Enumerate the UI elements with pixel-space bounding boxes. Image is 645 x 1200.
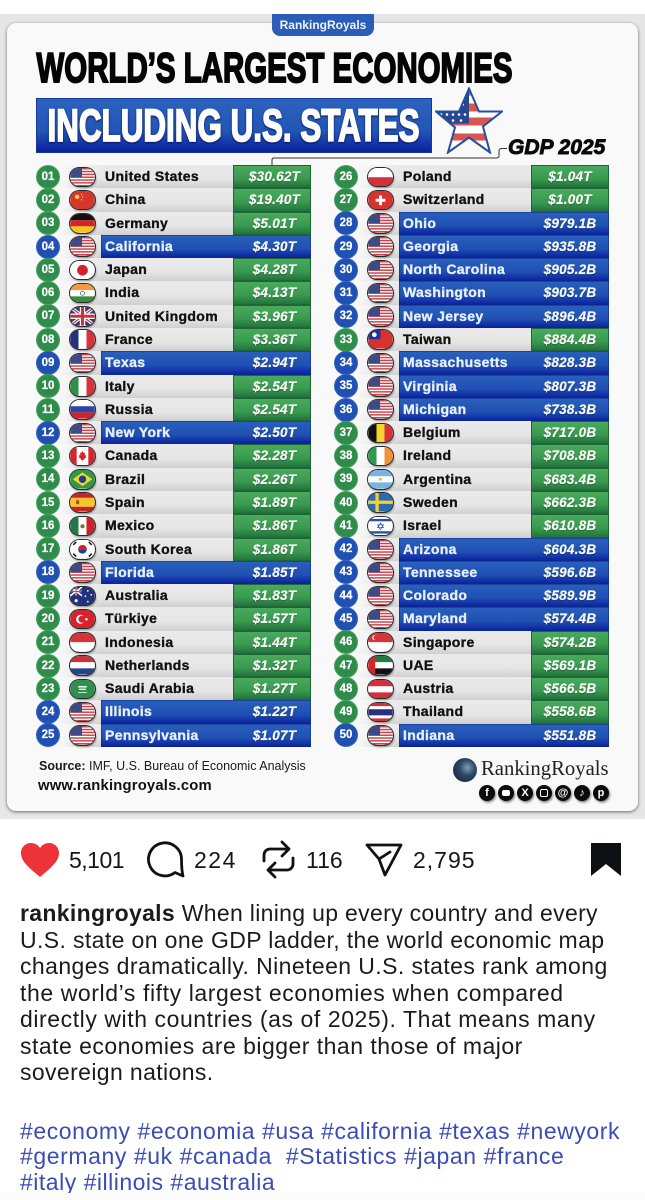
row 35 Virginia: $807.3B bbox=[544, 379, 596, 394]
row 02 China: 02 bbox=[42, 194, 54, 206]
row 04 California: $4.30T bbox=[253, 239, 296, 254]
row 21 Indonesia bbox=[36, 631, 312, 654]
bottom edge strip bbox=[0, 1193, 645, 1200]
row 44 Colorado bbox=[334, 584, 610, 607]
row 06 India: India bbox=[105, 284, 139, 300]
page background band bbox=[0, 14, 645, 819]
row 28 Ohio: $979.1B bbox=[544, 216, 596, 231]
row 31 Washington: Washington bbox=[403, 284, 486, 300]
row 06 India bbox=[36, 281, 312, 305]
social icons: p bbox=[598, 787, 604, 799]
brand tab bbox=[272, 14, 374, 36]
row 16 Mexico: Mexico bbox=[105, 517, 155, 533]
row 36 Michigan bbox=[334, 398, 610, 421]
row 03 Germany bbox=[36, 212, 312, 235]
website: www.rankingroyals.com bbox=[38, 778, 212, 794]
row 43 Tennessee: 43 bbox=[340, 566, 352, 578]
row 16 Mexico: 16 bbox=[42, 520, 54, 532]
row 13 Canada: Canada bbox=[105, 447, 158, 463]
row 18 Florida: 18 bbox=[42, 566, 54, 578]
row 45 Maryland: $574.4B bbox=[544, 611, 596, 626]
row 35 Virginia bbox=[334, 375, 610, 398]
row 22 Netherlands: Netherlands bbox=[105, 657, 190, 673]
row 05 Japan: $4.28T bbox=[253, 262, 296, 277]
row 28 Ohio: Ohio bbox=[403, 215, 436, 231]
row 25 Pennsylvania bbox=[36, 724, 312, 747]
row 33 Taiwan: $884.4B bbox=[544, 332, 596, 347]
social icons: ♪ bbox=[579, 787, 585, 799]
row 04 California: California bbox=[105, 238, 173, 254]
row 20 Türkiye: 20 bbox=[42, 613, 54, 625]
row 38 Ireland: 38 bbox=[340, 450, 352, 462]
row 19 Australia bbox=[36, 584, 312, 607]
row 02 China bbox=[36, 188, 312, 212]
row 46 Singapore bbox=[334, 631, 610, 654]
row 24 Illinois: $1.22T bbox=[253, 704, 296, 719]
row 12 New York: $2.50T bbox=[253, 425, 296, 440]
row 36 Michigan: $738.3B bbox=[544, 402, 596, 417]
row 47 UAE: UAE bbox=[403, 657, 434, 673]
row 17 South Korea: 17 bbox=[42, 543, 54, 555]
row 41 Israel: 41 bbox=[340, 520, 352, 532]
row 12 New York bbox=[36, 421, 312, 444]
row 06 India: 06 bbox=[42, 287, 54, 299]
row 49 Thailand: $558.6B bbox=[544, 704, 596, 719]
row 39 Argentina bbox=[334, 468, 610, 491]
row 39 Argentina: $683.4B bbox=[544, 472, 596, 487]
row 32 New Jersey: New Jersey bbox=[403, 308, 484, 324]
row 32 New Jersey: $896.4B bbox=[544, 309, 596, 324]
row 15 Spain bbox=[36, 491, 312, 514]
row 40 Sweden: 40 bbox=[340, 497, 352, 509]
row 41 Israel: Israel bbox=[403, 517, 442, 533]
row 11 Russia bbox=[36, 398, 312, 421]
row 13 Canada bbox=[36, 444, 312, 468]
row 17 South Korea: $1.86T bbox=[253, 542, 296, 556]
row 47 UAE bbox=[334, 654, 610, 677]
caption text: directly with countries (as of 2025). That means many bbox=[20, 1006, 596, 1032]
row 26 Poland bbox=[334, 165, 610, 188]
caption text: state economies are bigger than those of major bbox=[20, 1032, 523, 1058]
row 37 Belgium: 37 bbox=[340, 427, 352, 439]
row 26 Poland: $1.04T bbox=[548, 169, 592, 184]
row 35 Virginia: Virginia bbox=[403, 378, 457, 394]
row 10 Italy: Italy bbox=[105, 378, 135, 394]
row 22 Netherlands: $1.32T bbox=[253, 658, 296, 673]
row 15 Spain: Spain bbox=[105, 494, 145, 510]
row 33 Taiwan: Taiwan bbox=[403, 331, 452, 347]
row 28 Ohio: 28 bbox=[340, 217, 352, 229]
row 25 Pennsylvania: 25 bbox=[42, 729, 54, 741]
infographic card bbox=[7, 23, 638, 811]
row 10 Italy bbox=[36, 375, 312, 398]
row 42 Arizona bbox=[334, 538, 610, 561]
row 37 Belgium bbox=[334, 421, 610, 444]
row 17 South Korea: South Korea bbox=[105, 540, 192, 556]
row 38 Ireland: $708.8B bbox=[544, 448, 596, 463]
row 27 Switzerland: Switzerland bbox=[403, 191, 485, 207]
social icons: @ bbox=[558, 787, 568, 799]
row 20 Türkiye bbox=[36, 607, 312, 631]
icon: heart bbox=[21, 843, 59, 877]
row 03 Germany: $5.01T bbox=[253, 216, 296, 231]
row 49 Thailand: Thailand bbox=[403, 703, 463, 719]
row 48 Austria: $566.5B bbox=[544, 681, 596, 696]
row 15 Spain: $1.89T bbox=[253, 495, 296, 510]
row 13 Canada: $2.28T bbox=[253, 448, 296, 463]
row 09 Texas: $2.94T bbox=[253, 355, 296, 370]
row 14 Brazil: Brazil bbox=[105, 471, 145, 487]
row 49 Thailand: 49 bbox=[340, 706, 352, 718]
row 20 Türkiye: Türkiye bbox=[105, 610, 157, 626]
GDP 2025 label: GDP 2025 bbox=[508, 136, 605, 159]
row 48 Austria bbox=[334, 677, 610, 700]
row 18 Florida: $1.85T bbox=[253, 565, 296, 580]
row 26 Poland: 26 bbox=[340, 171, 352, 183]
row 14 Brazil bbox=[36, 468, 312, 491]
row 42 Arizona: 42 bbox=[340, 543, 352, 555]
row 11 Russia: $2.54T bbox=[253, 402, 296, 417]
row 04 California bbox=[36, 235, 312, 258]
row 35 Virginia: 35 bbox=[340, 380, 352, 392]
icon: brand logo globe bbox=[453, 758, 477, 782]
row 49 Thailand bbox=[334, 700, 610, 724]
icon: US flag star bbox=[435, 87, 503, 154]
connector line to first value bbox=[272, 148, 507, 165]
row 47 UAE: 47 bbox=[340, 660, 352, 672]
hashtags: #economy #economia #usa #california #texas #newyork bbox=[20, 1118, 620, 1144]
row 29 Georgia: Georgia bbox=[403, 238, 458, 254]
row 37 Belgium: $717.0B bbox=[544, 425, 596, 440]
row 48 Austria: Austria bbox=[403, 680, 454, 696]
row 30 North Carolina: 30 bbox=[340, 264, 352, 276]
row 34 Massachusetts: Massachusetts bbox=[403, 354, 508, 370]
row 19 Australia: 19 bbox=[42, 590, 54, 602]
row 07 United Kingdom: United Kingdom bbox=[105, 308, 218, 324]
row 32 New Jersey bbox=[334, 305, 610, 328]
row 27 Switzerland bbox=[334, 188, 610, 212]
row 09 Texas bbox=[36, 351, 312, 375]
row 02 China: China bbox=[105, 191, 146, 207]
row 06 India: $4.13T bbox=[253, 285, 296, 300]
row 07 United Kingdom: 07 bbox=[42, 310, 54, 322]
hashtags: #italy #illinois #australia bbox=[20, 1169, 275, 1195]
row 24 Illinois bbox=[36, 700, 312, 724]
row 11 Russia: Russia bbox=[105, 401, 153, 417]
row 41 Israel bbox=[334, 514, 610, 538]
row 39 Argentina: Argentina bbox=[403, 471, 472, 487]
row 03 Germany: 03 bbox=[42, 217, 54, 229]
row 30 North Carolina: North Carolina bbox=[403, 261, 505, 277]
row 50 Indiana: 50 bbox=[340, 729, 352, 741]
row 10 Italy: 10 bbox=[42, 380, 54, 392]
row 21 Indonesia: 21 bbox=[42, 636, 54, 648]
row 14 Brazil: 14 bbox=[42, 473, 54, 485]
row 26 Poland: Poland bbox=[403, 168, 452, 184]
row 09 Texas: 09 bbox=[42, 357, 54, 369]
row 09 Texas: Texas bbox=[105, 354, 145, 370]
row 31 Washington: 31 bbox=[340, 287, 352, 299]
row 18 Florida bbox=[36, 561, 312, 584]
row 30 North Carolina: $905.2B bbox=[544, 262, 596, 277]
row 45 Maryland: 45 bbox=[340, 613, 352, 625]
social icons: X bbox=[521, 787, 529, 799]
row 39 Argentina: 39 bbox=[340, 473, 352, 485]
social icons bbox=[478, 785, 612, 804]
row 17 South Korea bbox=[36, 538, 312, 561]
row 12 New York: 12 bbox=[42, 427, 54, 439]
row 38 Ireland: Ireland bbox=[403, 447, 451, 463]
caption text: the world’s fifty largest economies when compared bbox=[20, 980, 564, 1006]
row 05 Japan bbox=[36, 258, 312, 281]
row 23 Saudi Arabia: Saudi Arabia bbox=[105, 680, 194, 696]
row 46 Singapore: Singapore bbox=[403, 634, 475, 650]
row 45 Maryland bbox=[334, 607, 610, 631]
row 07 United Kingdom bbox=[36, 305, 312, 328]
row 01 United States: 01 bbox=[42, 171, 54, 183]
row 34 Massachusetts: $828.3B bbox=[544, 355, 596, 370]
row 23 Saudi Arabia: 23 bbox=[42, 683, 54, 695]
row 40 Sweden: Sweden bbox=[403, 494, 458, 510]
row 03 Germany: Germany bbox=[105, 215, 168, 231]
row 16 Mexico: $1.86T bbox=[253, 518, 296, 533]
row 50 Indiana bbox=[334, 724, 610, 747]
row 07 United Kingdom: $3.96T bbox=[253, 309, 296, 324]
row 18 Florida: Florida bbox=[105, 564, 154, 580]
row 32 New Jersey: 32 bbox=[340, 310, 352, 322]
row 08 France: 08 bbox=[42, 334, 54, 346]
row 14 Brazil: $2.26T bbox=[253, 472, 296, 487]
row 13 Canada: 13 bbox=[42, 450, 54, 462]
ranking column 26-50 bbox=[334, 165, 609, 748]
row 01 United States bbox=[36, 165, 312, 188]
caption text bbox=[20, 900, 608, 1085]
row 42 Arizona: $604.3B bbox=[544, 542, 596, 556]
icon: send bbox=[366, 844, 402, 876]
row 40 Sweden: $662.3B bbox=[544, 495, 596, 510]
ranking column 1-25 bbox=[36, 165, 311, 748]
row 48 Austria: 48 bbox=[340, 683, 352, 695]
row 23 Saudi Arabia bbox=[36, 677, 312, 700]
row 24 Illinois: Illinois bbox=[105, 703, 152, 719]
icon: comment bbox=[147, 841, 184, 878]
row 02 China: $19.40T bbox=[249, 192, 300, 207]
comments count: 224 bbox=[194, 847, 237, 873]
row 16 Mexico bbox=[36, 514, 312, 538]
hashtags bbox=[20, 1118, 620, 1195]
row 27 Switzerland: 27 bbox=[340, 194, 352, 206]
shares count: 2,795 bbox=[413, 847, 476, 873]
row 34 Massachusetts: 34 bbox=[340, 357, 352, 369]
row 24 Illinois: 24 bbox=[42, 706, 54, 718]
row 45 Maryland: Maryland bbox=[403, 610, 467, 626]
caption text: changes dramatically. Nineteen U.S. states rank among bbox=[20, 953, 608, 979]
row 46 Singapore: $574.2B bbox=[544, 635, 596, 650]
row 29 Georgia: 29 bbox=[340, 241, 352, 253]
row 25 Pennsylvania: $1.07T bbox=[253, 728, 296, 743]
row 40 Sweden bbox=[334, 491, 610, 514]
row 19 Australia: $1.83T bbox=[253, 588, 296, 603]
row 33 Taiwan: 33 bbox=[340, 334, 352, 346]
row 21 Indonesia: $1.44T bbox=[253, 635, 296, 650]
brand tab: RankingRoyals bbox=[280, 18, 366, 32]
row 44 Colorado: 44 bbox=[340, 590, 352, 602]
row 37 Belgium: Belgium bbox=[403, 424, 461, 440]
row 19 Australia: Australia bbox=[105, 587, 168, 603]
row 01 United States: $30.62T bbox=[249, 169, 300, 184]
row 50 Indiana: Indiana bbox=[403, 727, 454, 743]
row 46 Singapore: 46 bbox=[340, 636, 352, 648]
row 44 Colorado: $589.9B bbox=[544, 588, 596, 603]
row 34 Massachusetts bbox=[334, 351, 610, 375]
row 36 Michigan: Michigan bbox=[403, 401, 466, 417]
row 08 France bbox=[36, 328, 312, 351]
row 25 Pennsylvania: Pennsylvania bbox=[105, 727, 199, 743]
row 22 Netherlands bbox=[36, 654, 312, 677]
row 15 Spain: 15 bbox=[42, 497, 54, 509]
row 22 Netherlands: 22 bbox=[42, 660, 54, 672]
reposts count: 116 bbox=[306, 847, 343, 873]
row 41 Israel: $610.8B bbox=[544, 518, 596, 533]
row 10 Italy: $2.54T bbox=[253, 379, 296, 394]
row 28 Ohio bbox=[334, 212, 610, 235]
row 42 Arizona: Arizona bbox=[403, 540, 457, 556]
icon: repost bbox=[262, 840, 294, 878]
row 44 Colorado: Colorado bbox=[403, 587, 467, 603]
row 23 Saudi Arabia: $1.27T bbox=[253, 681, 296, 696]
row 27 Switzerland: $1.00T bbox=[548, 192, 592, 207]
row 29 Georgia: $935.8B bbox=[544, 239, 596, 254]
caption text: U.S. state on one GDP ladder, the world economic map bbox=[20, 926, 604, 952]
row 43 Tennessee: Tennessee bbox=[403, 564, 477, 580]
row 50 Indiana: $551.8B bbox=[544, 728, 596, 743]
row 33 Taiwan bbox=[334, 328, 610, 351]
row 08 France: $3.36T bbox=[253, 332, 296, 347]
row 04 California: 04 bbox=[42, 241, 54, 253]
row 43 Tennessee: $596.6B bbox=[544, 565, 596, 580]
row 31 Washington: $903.7B bbox=[544, 285, 596, 300]
row 21 Indonesia: Indonesia bbox=[105, 634, 174, 650]
row 29 Georgia bbox=[334, 235, 610, 258]
row 01 United States: United States bbox=[105, 168, 199, 184]
row 36 Michigan: 36 bbox=[340, 404, 352, 416]
row 20 Türkiye: $1.57T bbox=[253, 611, 296, 626]
row 30 North Carolina bbox=[334, 258, 610, 281]
icon: bookmark bbox=[591, 843, 621, 876]
source note: Source: IMF, U.S. Bureau of Economic Analysis bbox=[39, 759, 306, 773]
caption text: rankingroyals When lining up every country and every bbox=[20, 900, 598, 926]
row 05 Japan: Japan bbox=[105, 261, 147, 277]
row 12 New York: New York bbox=[105, 424, 170, 440]
row 43 Tennessee bbox=[334, 561, 610, 584]
row 11 Russia: 11 bbox=[42, 404, 54, 416]
row 47 UAE: $569.1B bbox=[544, 658, 596, 673]
row 38 Ireland bbox=[334, 444, 610, 468]
social icons: f bbox=[485, 787, 489, 799]
caption text: sovereign nations. bbox=[20, 1059, 214, 1085]
brand name: RankingRoyals bbox=[481, 758, 609, 780]
hashtags: #germany #uk #canada #Statistics #japan #france bbox=[20, 1143, 564, 1169]
row 08 France: France bbox=[105, 331, 153, 347]
row 05 Japan: 05 bbox=[42, 264, 54, 276]
row 31 Washington bbox=[334, 281, 610, 305]
likes count: 5,101 bbox=[69, 847, 124, 873]
